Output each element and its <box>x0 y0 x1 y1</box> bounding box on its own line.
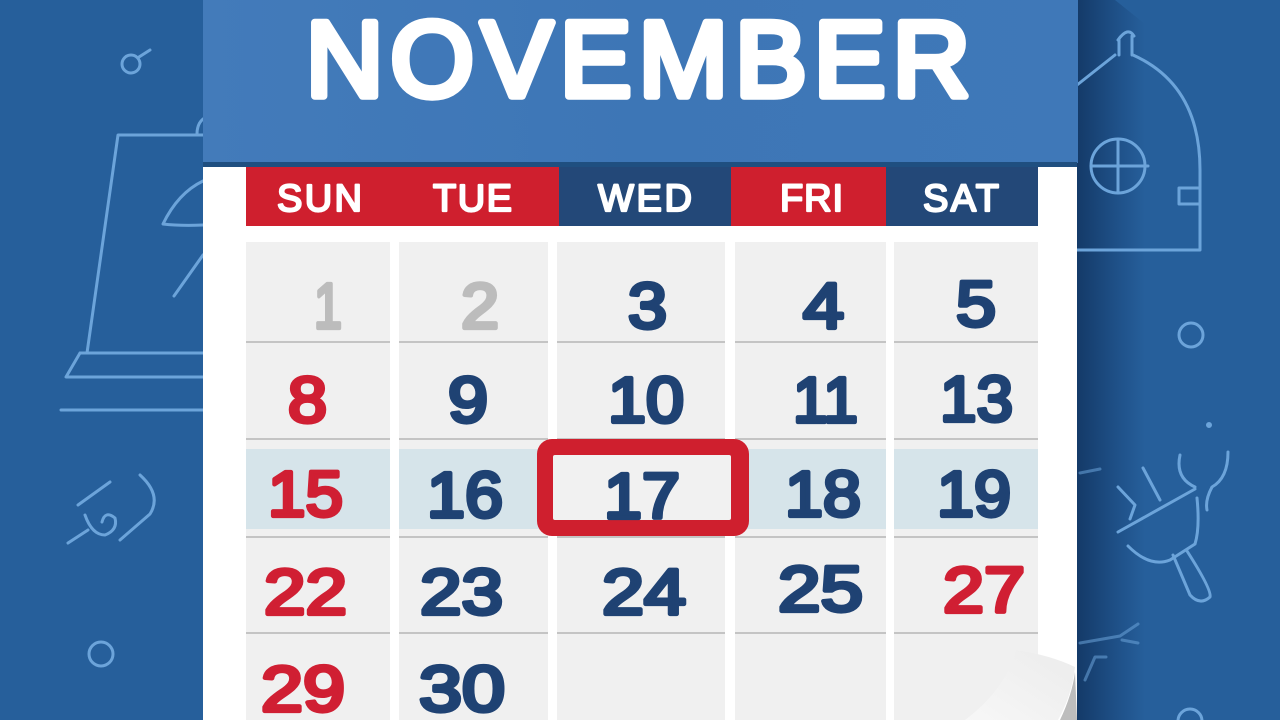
weekday header row: SUN <box>277 178 362 220</box>
dates row 4: 22 <box>264 556 347 628</box>
dates row 4: 23 <box>420 556 503 628</box>
title: NOVEMBER <box>306 0 970 119</box>
dates row 4 <box>264 553 1025 628</box>
icon: left small circle <box>89 642 113 666</box>
dates row 3: 17 <box>604 460 680 532</box>
page shadow on the right <box>1077 0 1145 720</box>
dates row 1: 1 <box>314 270 342 342</box>
dates row 2: 13 <box>940 363 1013 435</box>
page curl corner <box>965 650 1077 720</box>
dates row 2: 8 <box>288 364 327 436</box>
dates row 3: 18 <box>785 458 861 530</box>
icon: left desk lamp outline <box>61 119 203 410</box>
dates row 3: 19 <box>937 458 1011 530</box>
weekday header row: SAT <box>923 178 999 220</box>
weekday header row: WED <box>598 178 692 220</box>
icon: bottom right circle <box>1178 709 1202 720</box>
dates row 2: 9 <box>448 364 488 436</box>
weekday header row: TUE <box>433 178 512 220</box>
dates row 3: 16 <box>427 459 503 531</box>
dates row 2: 10 <box>608 364 684 436</box>
dates row 1: 5 <box>956 268 996 340</box>
dates row 2: 11 <box>793 364 858 436</box>
weekday header row: FRI <box>780 178 843 220</box>
icon: left sketch tool <box>68 475 154 543</box>
dates row 3: 15 <box>268 458 343 530</box>
dates row 1: 3 <box>628 270 667 342</box>
dates row 1: 2 <box>461 270 499 342</box>
dates row 1 <box>314 268 996 342</box>
calendar sheet <box>203 160 1077 720</box>
icon: right small circle <box>1179 323 1203 347</box>
dates row 5 <box>261 653 505 720</box>
icon: small ring with tail <box>122 50 150 73</box>
dates row 4: 25 <box>778 553 863 625</box>
icon: faint lower right sketch <box>1080 469 1138 680</box>
dates row 4: 27 <box>943 554 1025 626</box>
header band <box>203 0 1078 167</box>
icon: right dome outline <box>1077 32 1200 250</box>
dates row 1: 4 <box>803 270 844 342</box>
dates row 3 <box>268 458 1011 532</box>
highlight: day 17 <box>537 439 749 536</box>
calendar grid cells <box>246 242 1038 720</box>
icon: right frying pan <box>1118 424 1228 601</box>
weekday header row <box>246 167 1038 226</box>
dates row 2 <box>288 363 1013 436</box>
dates row 4: 24 <box>602 556 686 628</box>
